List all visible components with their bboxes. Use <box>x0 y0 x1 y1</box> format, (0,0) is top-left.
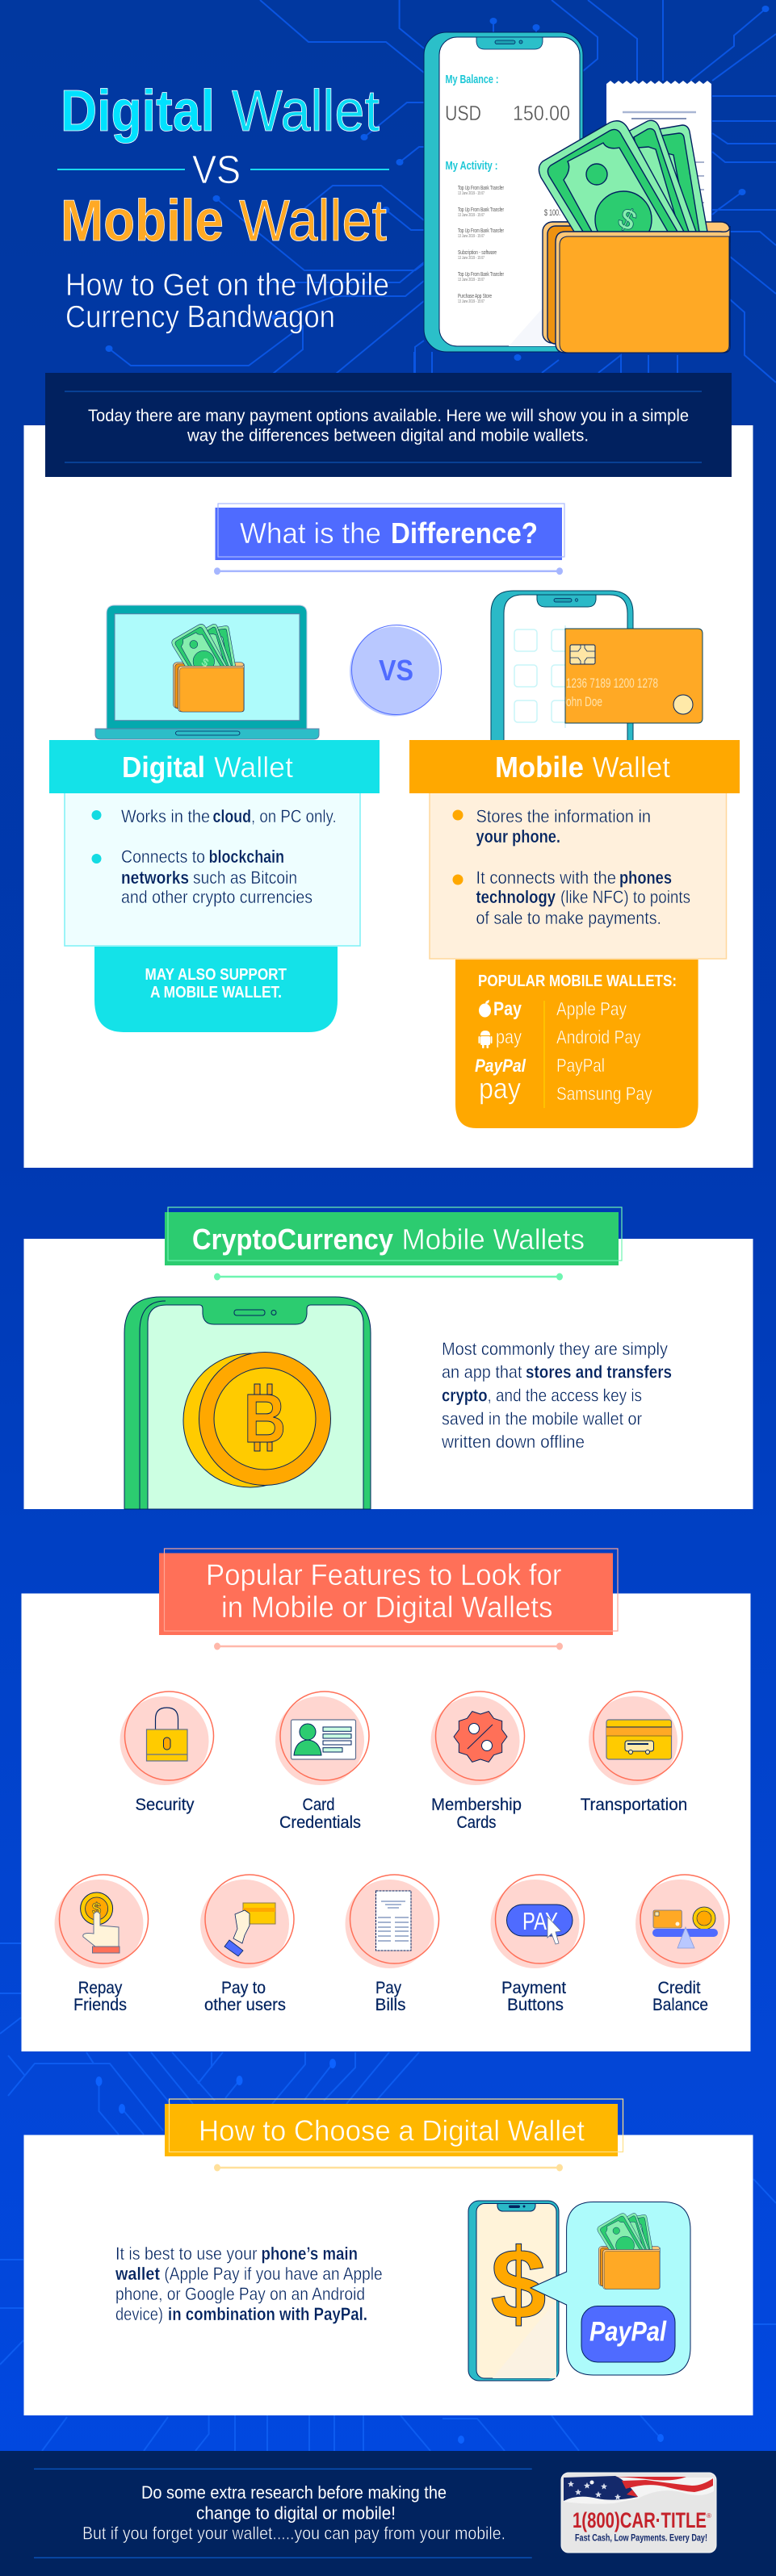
activity list: 13 June 2019 - 15:07 <box>458 278 484 282</box>
popular mobile wallets list: PayPal <box>556 1055 605 1076</box>
icon: vs circle <box>350 625 441 717</box>
logo: 1(800)car-title plate <box>561 2473 716 2553</box>
digital wallet body: networks <box>121 868 189 888</box>
feature: security: Security <box>136 1796 195 1814</box>
mobile wallet body: of sale to make payments. <box>476 908 661 928</box>
digital wallet callout: MAY ALSO SUPPORT <box>145 966 287 984</box>
heading: popular features: Popular Features to Look for <box>206 1558 562 1591</box>
button: paypal: PayPal <box>589 2317 667 2348</box>
digital wallet body: , on PC only. <box>251 806 337 826</box>
feature: security <box>120 1692 213 1814</box>
logo: apple pay <box>479 998 522 1020</box>
feature: pay bills <box>346 1875 439 2014</box>
activity list: Subcription - software <box>458 250 497 256</box>
header illustration: phone, receipt, cash and wallet <box>424 32 730 353</box>
subtitle: Currency Bandwagon <box>65 300 335 334</box>
intro box: Today there are many payment options available. Here we will show you in a simple <box>88 406 689 425</box>
text: how to choose description: (Apple Pay if you have an Apple <box>164 2264 383 2284</box>
popular mobile wallets list: Apple Pay <box>556 998 627 1019</box>
mobile wallet header: Mobile <box>495 751 584 784</box>
popular mobile wallets list: Android Pay <box>556 1027 641 1048</box>
footer text <box>82 2482 505 2544</box>
text: how to choose description <box>115 2244 383 2324</box>
subtitle <box>65 268 389 334</box>
logo: samsung pay: pay <box>479 1072 521 1105</box>
feature: card credentials: Card <box>302 1796 334 1814</box>
heading: how to choose: How to Choose a Digital Wallet <box>199 2114 585 2147</box>
activity list: My Activity : <box>446 159 497 173</box>
feature: credit balance: Credit <box>657 1979 701 1997</box>
digital wallet callout: A MOBILE WALLET. <box>150 984 282 1002</box>
feature: card credentials <box>275 1692 369 1832</box>
logo: 1(800)car-title plate: 1(800)CAR·TITLE <box>573 2508 707 2532</box>
button: paypal <box>581 2306 675 2362</box>
popular mobile wallets list: Samsung Pay <box>556 1083 652 1104</box>
text: crypto wallets description: , and the access key is <box>488 1386 642 1406</box>
digital wallet body <box>65 793 360 946</box>
feature: membership cards: Membership <box>431 1796 522 1814</box>
icon: phone with dollar <box>468 2201 559 2381</box>
feature: membership cards <box>431 1692 525 1832</box>
feature: repay friends: $ <box>92 1901 101 1918</box>
feature: payment buttons: PAY <box>522 1907 558 1935</box>
mobile wallet body: (like NFC) to points <box>560 887 690 907</box>
digital wallet body: cloud <box>213 806 251 826</box>
logo: apple pay: Pay <box>493 998 522 1020</box>
text: crypto wallets description <box>441 1339 672 1452</box>
icon: bitcoin coin <box>183 1353 331 1487</box>
title line: digital wallet: Digital <box>61 79 215 144</box>
panel: popular features <box>21 1549 751 2051</box>
circuit dots lower <box>95 2059 664 2444</box>
activity list <box>446 159 560 304</box>
activity list: Top Up From Bank Transfer <box>458 207 504 213</box>
footer text: Do some extra research before making the <box>141 2482 447 2503</box>
balance text <box>445 73 570 125</box>
feature: transportation: Transportation <box>581 1796 687 1814</box>
feature: pay bills: Bills <box>375 1996 405 2014</box>
heading: cryptocurrency <box>165 1207 622 1280</box>
text: crypto wallets description: saved in the mobile wallet or <box>442 1409 642 1429</box>
activity list: 13 June 2019 - 15:07 <box>458 191 484 196</box>
feature: repay friends: Repay <box>78 1979 123 1997</box>
mobile wallet body <box>430 793 727 959</box>
mobile wallet body: phones <box>619 868 672 888</box>
text: how to choose description: device) <box>115 2304 163 2324</box>
popular mobile wallets list <box>455 960 698 1128</box>
feature: payment buttons: Payment <box>501 1979 566 1997</box>
title divider: vs: VS <box>192 148 241 192</box>
text: how to choose description: It is best to use your <box>115 2244 258 2264</box>
feature: pay to other users: Pay to <box>221 1979 266 1997</box>
speech bubble with wallet and paypal <box>531 2202 690 2375</box>
footer text: But if you forget your wallet.....you can pay from your mobile. <box>82 2523 505 2544</box>
feature: credit balance <box>635 1875 729 2014</box>
activity list: Top Up From Bank Transfer <box>458 186 504 191</box>
activity list: Top Up From Bank Transfer <box>458 272 504 278</box>
heading: how to choose <box>165 2099 623 2171</box>
feature: membership cards: Cards <box>457 1813 496 1832</box>
panel: difference <box>24 373 753 1168</box>
digital wallet header: Wallet <box>214 751 293 784</box>
column: digital wallet <box>49 740 380 1032</box>
icon: wallet with cash <box>598 2213 660 2289</box>
text: how to choose description: phone, or Google Pay on an Android <box>115 2284 365 2304</box>
text: how to choose description: in combination with PayPal. <box>168 2304 367 2324</box>
logo: 1(800)car-title plate: Fast Cash, Low Payments. Every Day! <box>575 2534 707 2544</box>
title line: mobile wallet <box>61 189 387 253</box>
digital wallet body: Works in the <box>121 806 210 826</box>
subtitle: How to Get on the Mobile <box>65 268 389 303</box>
icon: vs circle: VS <box>379 654 413 687</box>
card details: 1236 7189 1200 1278 <box>566 675 658 691</box>
heading: popular features: in Mobile or Digital Wallets <box>221 1591 552 1624</box>
mobile wallet header <box>409 740 740 793</box>
activity list: 13 June 2019 - 15:07 <box>458 299 484 304</box>
title line: mobile wallet: Mobile <box>61 189 224 253</box>
heading: what is the difference: What is the <box>240 516 381 550</box>
title line: digital wallet <box>61 79 380 144</box>
feature: pay to other users <box>200 1875 294 2014</box>
text: how to choose description: wallet <box>115 2264 161 2284</box>
balance text: My Balance : <box>446 73 499 86</box>
icon: phone with bitcoin <box>124 1297 371 1509</box>
feature: payment buttons: Buttons <box>507 1996 564 2014</box>
card details <box>565 678 657 706</box>
circuit dots top <box>105 6 769 361</box>
balance text: 150.00 <box>513 101 570 125</box>
popular mobile wallets list: POPULAR MOBILE WALLETS: <box>478 972 677 990</box>
logo: 1(800)car-title plate: ® <box>707 2512 711 2520</box>
icon: bitcoin coin: B <box>244 1381 286 1457</box>
digital wallet header <box>49 740 380 793</box>
digital wallet body: blockchain <box>209 847 284 867</box>
column: mobile wallet <box>409 740 740 1128</box>
mobile wallet body: Stores the information in <box>476 806 651 826</box>
feature: transportation <box>581 1692 687 1814</box>
feature: credit balance: Balance <box>652 1996 708 2014</box>
title line: mobile wallet: Wallet <box>239 189 387 253</box>
text: crypto wallets description: an app that <box>442 1362 522 1382</box>
icon: cash in wallet <box>539 120 730 353</box>
mobile wallet body: It connects with the <box>476 868 616 888</box>
activity list: 13 June 2019 - 15:07 <box>458 213 484 218</box>
feature: repay friends: Friends <box>73 1996 127 2014</box>
icon: phone with balance <box>424 32 583 352</box>
balance text: USD <box>445 101 481 125</box>
text: crypto wallets description: written down offline <box>441 1432 585 1452</box>
digital wallet body: and other crypto currencies <box>121 887 312 907</box>
heading: what is the difference <box>214 504 564 575</box>
icon: cash in wallet: $ <box>614 201 642 237</box>
mobile wallet body: technology <box>476 887 556 907</box>
icon: receipt <box>606 81 711 234</box>
digital wallet callout <box>94 947 338 1032</box>
panel: how to choose <box>24 2099 753 2415</box>
card details: John Doe <box>561 694 602 709</box>
digital wallet header: Digital <box>122 751 205 784</box>
activity list: Purchase App Store <box>458 294 492 299</box>
digital wallet body: Connects to <box>121 847 205 867</box>
intro box <box>45 373 732 477</box>
text: how to choose description: phone’s main <box>262 2244 358 2264</box>
heading: popular features <box>159 1549 618 1650</box>
intro box: way the differences between digital and mobile wallets. <box>187 426 589 445</box>
icon: phone with card <box>491 591 703 746</box>
feature: pay to other users: other users <box>204 1996 286 2014</box>
activity list: 13 June 2019 - 15:07 <box>458 256 484 261</box>
icon: laptop with wallet <box>95 605 319 739</box>
activity list: $ 100. <box>544 208 560 218</box>
title line: digital wallet: Wallet <box>232 79 380 144</box>
title <box>57 79 389 334</box>
activity list: Top Up From Bank Transfer <box>458 228 504 234</box>
panel: cryptocurrency mobile wallets <box>24 1207 753 1509</box>
logo: android pay <box>478 1027 522 1048</box>
card chip <box>570 645 595 664</box>
footer <box>0 2451 776 2576</box>
heading: cryptocurrency: CryptoCurrency <box>192 1223 393 1256</box>
mobile wallet body: your phone. <box>476 826 560 847</box>
heading: what is the difference: Difference? <box>391 516 538 550</box>
logo: android pay: pay <box>496 1027 522 1048</box>
heading: cryptocurrency: Mobile Wallets <box>402 1223 585 1256</box>
circuit pattern lower <box>0 1943 776 2451</box>
icon: laptop with wallet: $ <box>199 655 211 669</box>
text: crypto wallets description: Most commonly they are simply <box>442 1339 668 1359</box>
text: crypto wallets description: stores and transfers <box>526 1362 672 1382</box>
feature: repay friends <box>55 1875 149 2014</box>
activity list: 13 June 2019 - 15:07 <box>458 234 484 239</box>
feature: pay bills: Pay <box>375 1979 401 1997</box>
digital wallet body: such as Bitcoin <box>193 868 297 888</box>
text: crypto wallets description: crypto <box>442 1386 488 1406</box>
feature: payment buttons <box>491 1875 585 2014</box>
logo: paypal: PayPal <box>475 1056 526 1076</box>
circuit pattern top <box>109 0 776 383</box>
footer text: change to digital or mobile! <box>196 2503 396 2523</box>
icon: phone with dollar: $ <box>491 2229 546 2340</box>
feature: card credentials: Credentials <box>279 1813 361 1832</box>
mobile wallet header: Wallet <box>593 751 670 784</box>
